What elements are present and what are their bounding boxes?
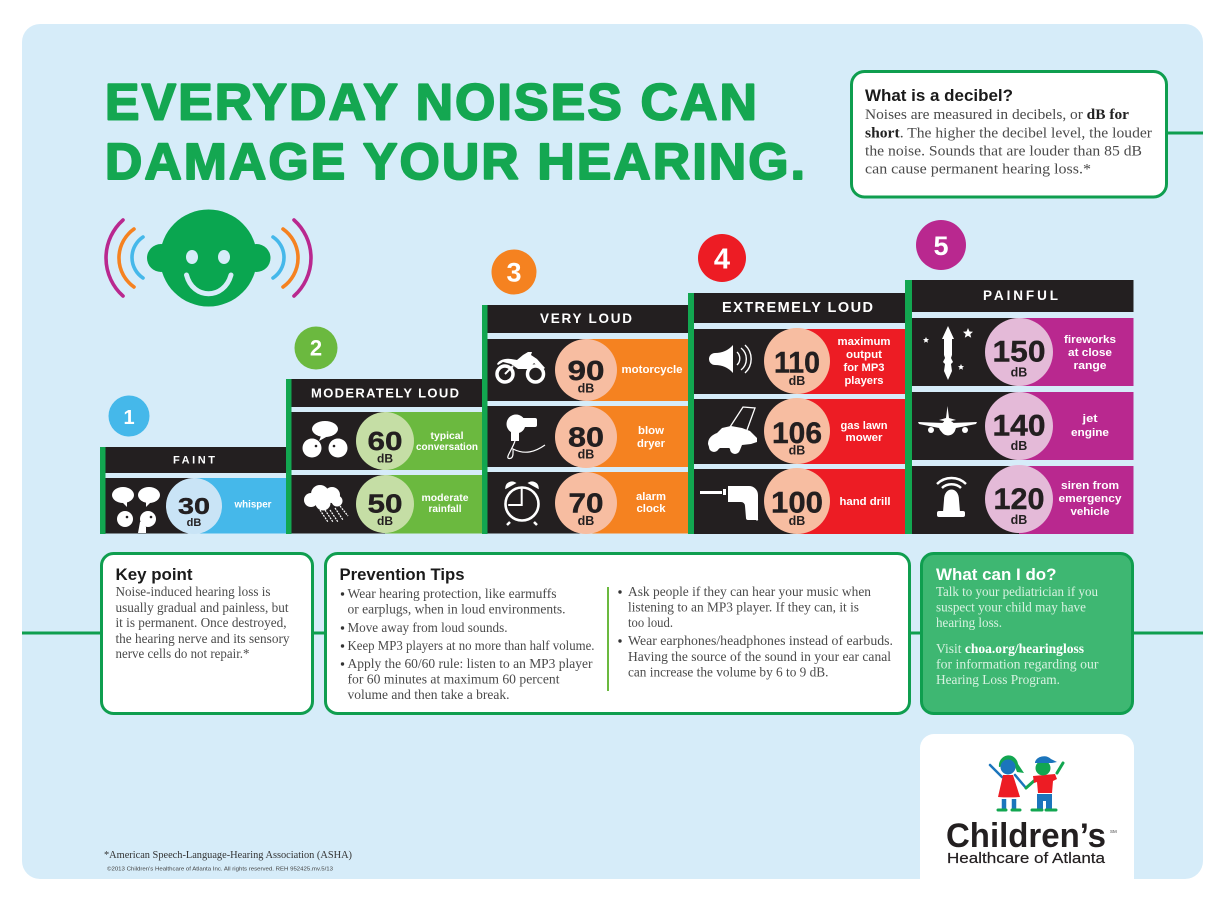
heading: moderately loud: MODERATELY LOUD [311, 386, 459, 400]
row: emergency siren 120 dB: dB [1011, 513, 1027, 527]
row: emergency siren 120 dB: emergency [1058, 493, 1122, 505]
badge 1 [108, 396, 150, 436]
panel: key point [102, 554, 312, 714]
panel: key point: Key point [116, 565, 193, 584]
badge 2: 2 [310, 336, 322, 361]
column 1: faint [100, 396, 286, 534]
row: typical conversation 60 dB: dB [377, 452, 393, 466]
column 4: extremely loud [688, 234, 905, 534]
panel: key point: the hearing nerve and its sensory [116, 632, 290, 647]
panel: what can I do: suspect your child may have [936, 600, 1086, 616]
row: typical conversation 60 dB: 60 [368, 428, 402, 456]
heading: very loud: VERY LOUD [540, 311, 632, 326]
row: hand drill 100 dB: dB [789, 514, 805, 528]
row: fireworks 150 dB: 150 [992, 336, 1046, 369]
badge 3 [492, 250, 536, 294]
panel: what can I do: What can I do? [936, 565, 1056, 584]
panel: prevention tips [326, 554, 910, 714]
title: EVERYDAY NOISES CAN [105, 73, 757, 131]
badge 5 [916, 220, 966, 270]
panel: what can I do [922, 554, 1132, 714]
row: emergency siren 120 dB: vehicle [1070, 506, 1110, 518]
row: fireworks 150 dB: dB [1011, 366, 1027, 380]
row: moderate rainfall 50 dB: moderate [422, 493, 469, 504]
icon: rain cloud [304, 485, 348, 522]
row: alarm clock 70 dB [488, 472, 688, 534]
row: jet engine 140 dB [912, 392, 1134, 460]
row: gas lawn mower 106 dB: 106 [772, 417, 822, 450]
row: whisper 30 dB: dB [187, 517, 201, 529]
heading: faint [106, 447, 286, 473]
row: alarm clock 70 dB: 70 [568, 488, 604, 518]
tips list: left column: or earplugs, when in loud environments. [348, 603, 566, 618]
badge 4: 4 [714, 244, 730, 276]
row: gas lawn mower 106 dB: gas lawn [840, 420, 888, 432]
row: alarm clock 70 dB: clock [636, 503, 666, 515]
icon: fireworks rocket [923, 326, 973, 380]
icon: blow dryer [506, 414, 545, 459]
tips list: left column: Apply the 60/60 rule: listen to an MP3 player [348, 657, 593, 672]
icon: hand drill [700, 486, 758, 521]
column 5: painful [905, 220, 1134, 534]
row: motorcycle 90 dB: dB [578, 382, 594, 396]
copyright: ©2013 Children's Healthcare of Atlanta Inc. All rights reserved. REH 952425.mv.5/13 [107, 866, 333, 872]
callout: what is a decibel [852, 72, 1203, 197]
heading: very loud [488, 305, 688, 333]
column 3: very loud [482, 250, 688, 534]
logo: Children's Healthcare of Atlanta: Healthcare of Atlanta [947, 850, 1106, 867]
tips list: left column: Keep MP3 players at no more than half volume. [348, 639, 594, 654]
row: typical conversation 60 dB: conversation [416, 442, 478, 453]
row: alarm clock 70 dB: alarm [636, 491, 666, 503]
footnote: *American Speech-Language-Hearing Association (ASHA) [104, 849, 352, 861]
panel: key point: it is permanent. Once destroyed, [116, 616, 286, 631]
row: gas lawn mower 106 dB: dB [789, 444, 805, 458]
row: hand drill 100 dB: 100 [771, 487, 823, 520]
row: typical conversation 60 dB: typical [430, 431, 464, 442]
tips list: right column: Having the source of the sound in your ear canal [628, 650, 891, 665]
row: emergency siren 120 dB [912, 465, 1134, 534]
heading: moderately loud [292, 379, 482, 407]
tips list: right column: Wear earphones/headphones instead of earbuds. [628, 634, 893, 649]
badge 1: 1 [123, 407, 135, 429]
row: hand drill 100 dB: hand drill [840, 496, 890, 508]
tips list: left column: volume and then take a break. [348, 688, 510, 703]
row: MP3 player output 110 dB: for MP3 [844, 362, 884, 374]
heading: extremely loud: EXTREMELY LOUD [722, 300, 873, 316]
panel: prevention tips: Prevention Tips [340, 565, 464, 584]
tips list: left column: Move away from loud sounds. [348, 621, 508, 636]
row: fireworks 150 dB: range [1074, 360, 1106, 372]
badge 5: 5 [933, 231, 949, 261]
row: blow dryer 80 dB: dB [578, 448, 594, 462]
logo: Children's Healthcare of Atlanta [920, 734, 1134, 879]
row: MP3 player output 110 dB: 110 [774, 347, 820, 380]
tips list: left column: Wear hearing protection, like earmuffs [348, 587, 556, 602]
row: motorcycle 90 dB: 90 [568, 355, 604, 386]
row: MP3 player output 110 dB [694, 328, 905, 394]
row: blow dryer 80 dB: dryer [637, 438, 666, 450]
icon: speaker [709, 345, 751, 373]
row: moderate rainfall 50 dB: rainfall [428, 504, 462, 515]
tips list: left column [341, 587, 594, 703]
row: moderate rainfall 50 dB: dB [377, 514, 393, 528]
callout: what is a decibel: What is a decibel? [865, 86, 1013, 105]
icon: people talking [302, 421, 348, 458]
row: jet engine 140 dB: dB [1011, 439, 1027, 453]
row: typical conversation 60 dB [292, 412, 482, 470]
logo: Children's Healthcare of Atlanta: SM [1110, 829, 1117, 834]
row: hand drill 100 dB [694, 468, 905, 534]
row: motorcycle 90 dB [488, 339, 688, 401]
callout: what is a decibel: Noises are measured in decibels, or dB for [865, 107, 1130, 123]
tips list: right column [618, 585, 893, 680]
row: jet engine 140 dB: jet [1081, 413, 1098, 425]
row: blow dryer 80 dB: 80 [568, 422, 604, 452]
row: MP3 player output 110 dB: output [846, 349, 882, 361]
tips list: left column: for 60 minutes at maximum 60 percent [348, 672, 560, 688]
column 2: moderately loud [286, 326, 482, 534]
row: fireworks 150 dB: at close [1068, 347, 1112, 359]
callout: what is a decibel: can cause permanent hearing loss.* [865, 162, 1091, 178]
callout: what is a decibel: the noise. Sounds that are louder than 85 dB [865, 144, 1142, 160]
icon: smiling face with sound waves [106, 210, 311, 306]
heading: extremely loud [694, 293, 905, 323]
panel: what can I do: hearing loss. [936, 616, 1002, 631]
row: MP3 player output 110 dB: dB [789, 374, 805, 388]
row: alarm clock 70 dB: dB [578, 514, 594, 528]
connector line behind lower boxes [22, 632, 1203, 634]
row: emergency siren 120 dB: siren from [1061, 480, 1119, 492]
row: fireworks 150 dB [912, 318, 1134, 386]
heading: faint: FAINT [173, 454, 215, 466]
panel: what can I do: for information regarding our [936, 658, 1099, 672]
row: gas lawn mower 106 dB: mower [846, 432, 883, 444]
tips list: right column: can increase the volume by 6 to 9 dB. [628, 666, 828, 680]
row: whisper 30 dB: whisper [234, 500, 272, 510]
row: moderate rainfall 50 dB: 50 [368, 490, 402, 518]
panel: what can I do: Talk to your pediatrician if you [936, 585, 1098, 600]
row: moderate rainfall 50 dB [292, 475, 482, 534]
badge 3: 3 [506, 258, 522, 288]
row: blow dryer 80 dB [488, 406, 688, 468]
tips list: right column: listening to an MP3 player. If they can, it is [628, 600, 859, 616]
logo: Children's Healthcare of Atlanta: Children’s [946, 817, 1106, 855]
title [105, 73, 805, 190]
row: whisper 30 dB: 30 [178, 493, 210, 519]
row: fireworks 150 dB: fireworks [1064, 334, 1116, 346]
icon: siren [937, 478, 966, 517]
row: whisper 30 dB [106, 478, 286, 534]
row: gas lawn mower 106 dB [694, 398, 905, 464]
callout: what is a decibel: short. The higher the decibel level, the louder [865, 126, 1152, 142]
panel: what can I do: Hearing Loss Program. [936, 673, 1060, 688]
badge 4 [698, 234, 746, 282]
row: MP3 player output 110 dB: maximum [838, 336, 891, 348]
row: MP3 player output 110 dB: players [844, 375, 884, 387]
row: blow dryer 80 dB: blow [638, 425, 664, 437]
row: jet engine 140 dB: engine [1071, 427, 1109, 439]
row: emergency siren 120 dB: 120 [994, 483, 1044, 516]
badge 2 [294, 326, 338, 370]
icon: alarm clock [506, 482, 538, 525]
heading: painful [912, 280, 1134, 312]
panel: what can I do: Visit choa.org/hearingloss [936, 642, 1085, 657]
row: motorcycle 90 dB: motorcycle [622, 364, 682, 376]
icon: motorcycle [497, 352, 545, 382]
panel: key point: usually gradual and painless, but [116, 601, 289, 616]
icon: children holding hands [990, 755, 1063, 810]
icon: jet plane [918, 406, 977, 436]
heading: painful: PAINFUL [983, 288, 1058, 303]
icon: people whispering [112, 487, 160, 533]
icon: lawn mower [708, 407, 757, 454]
title: DAMAGE YOUR HEARING. [105, 132, 805, 190]
tips list: right column: Ask people if they can hear your music when [628, 585, 871, 600]
panel: key point: Noise-induced hearing loss is [116, 585, 270, 600]
panel: key point: nerve cells do not repair.* [116, 647, 250, 662]
tips list: right column: too loud. [628, 616, 673, 631]
row: jet engine 140 dB: 140 [992, 410, 1046, 443]
